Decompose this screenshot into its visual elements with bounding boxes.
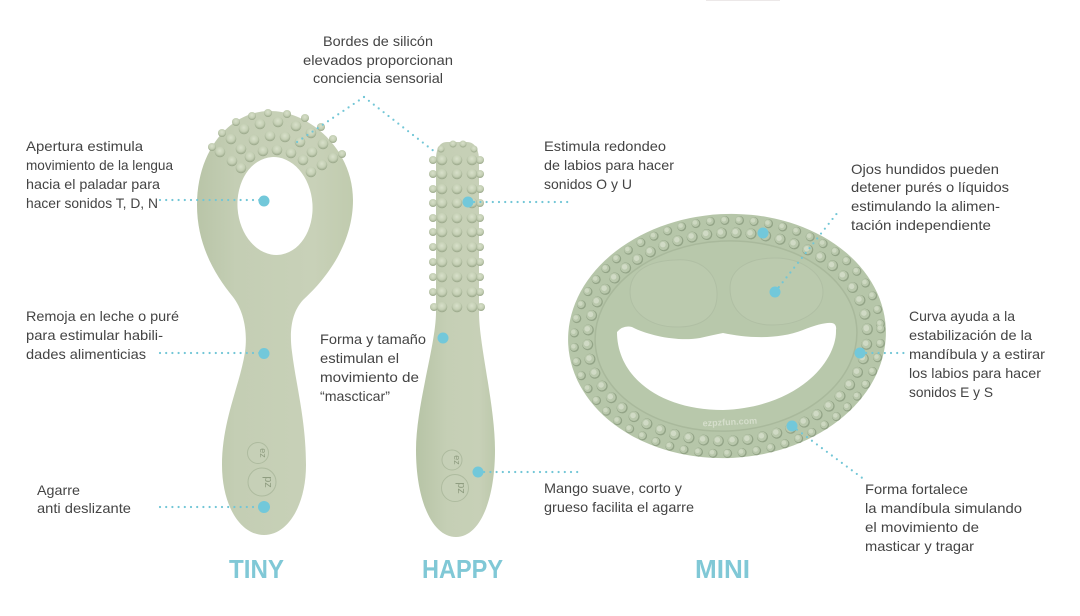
text: ojos hundidos: detener purés o líquidos [851,179,1009,195]
callout dots [258,196,866,513]
text: forma fortalece: masticar y tragar [865,538,974,554]
text: remoja: Remoja en leche o puré [26,308,179,324]
mini website text: ezpzfun.com [702,416,757,428]
mini raised ridge [590,234,862,438]
text: ojos hundidos: estimulando la alimen- [851,198,1000,214]
text: forma fortalece [865,481,1022,554]
text: apertura: movimiento de la lengua [26,157,173,173]
text: curva: estabilización de la [909,327,1032,343]
label: mini: MINI [695,554,750,584]
text: mango suave: Mango suave, corto y [544,480,682,496]
text: curva [909,308,1045,400]
happy teether [416,140,495,537]
text: bordes de silicón: elevados proporcionan [303,52,453,68]
mini left eye [630,260,717,327]
text: estimula redondeo [544,138,674,192]
text: forma fortalece: la mandíbula simulando [865,500,1022,516]
text: bordes de silicón: conciencia sensorial [313,70,443,86]
text: bordes de silicón: Bordes de silicón [323,33,433,49]
text: agarre: anti deslizante [37,500,131,516]
text: curva: los labios para hacer [909,365,1041,381]
text: ojos hundidos [851,161,1009,233]
text: apertura: Apertura estimula [26,138,143,154]
text: apertura: hacia el paladar para [26,176,160,192]
text: estimula redondeo: sonidos O y U [544,176,632,192]
text: forma y tamaño: “mascticar” [320,388,390,404]
tiny teether [197,109,353,535]
tiny ez logo: ez [258,448,268,458]
text: estimula redondeo: de labios para hacer [544,157,674,173]
text: estimula redondeo: Estimula redondeo [544,138,666,154]
mini teether [562,206,892,466]
text: remoja [26,308,179,362]
tiny ez logo: pz [262,476,274,488]
label: happy: HAPPY [422,554,503,584]
tiny opening [234,155,316,257]
text: remoja: dades alimenticias [26,346,146,362]
mini body [562,206,892,466]
text: mango suave [544,480,694,515]
text: bordes de silicón [303,33,453,86]
text: forma y tamaño: estimulan el [320,350,399,366]
happy ez logo: pz [455,482,467,494]
text: forma fortalece: el movimiento de [865,519,979,535]
text: ojos hundidos: Ojos hundidos pueden [851,161,999,177]
mini mouth [617,323,836,410]
tiny bumps [208,109,346,177]
text: forma fortalece: Forma fortalece [865,481,968,497]
text: curva: sonidos E y S [909,384,993,400]
label: tiny: TINY [229,554,284,584]
text: apertura: hacer sonidos T, D, N [26,195,158,211]
leader lines [160,97,905,507]
text: apertura [26,138,173,211]
text: forma y tamaño [320,331,426,404]
mini outer bump ring [567,211,887,461]
happy ez logo [442,450,468,502]
happy bumps [429,140,485,312]
happy ez logo: ez [452,455,462,465]
mini right eye [730,258,823,325]
text: agarre [37,482,131,516]
text: curva: Curva ayuda a la [909,308,1015,324]
text: remoja: para estimular habili- [26,327,163,343]
text: forma y tamaño: Forma y tamaño [320,331,426,347]
text: curva: mandíbula y a estirar [909,346,1045,362]
tiny body [197,111,353,535]
text: forma y tamaño: movimiento de [320,369,419,385]
text: ojos hundidos: tación independiente [851,217,991,233]
tiny ez logo [248,442,276,496]
happy body [416,142,495,537]
text: mango suave: grueso facilita el agarre [544,499,694,515]
mini inner bump ring [581,225,873,448]
text: agarre: Agarre [37,482,80,498]
